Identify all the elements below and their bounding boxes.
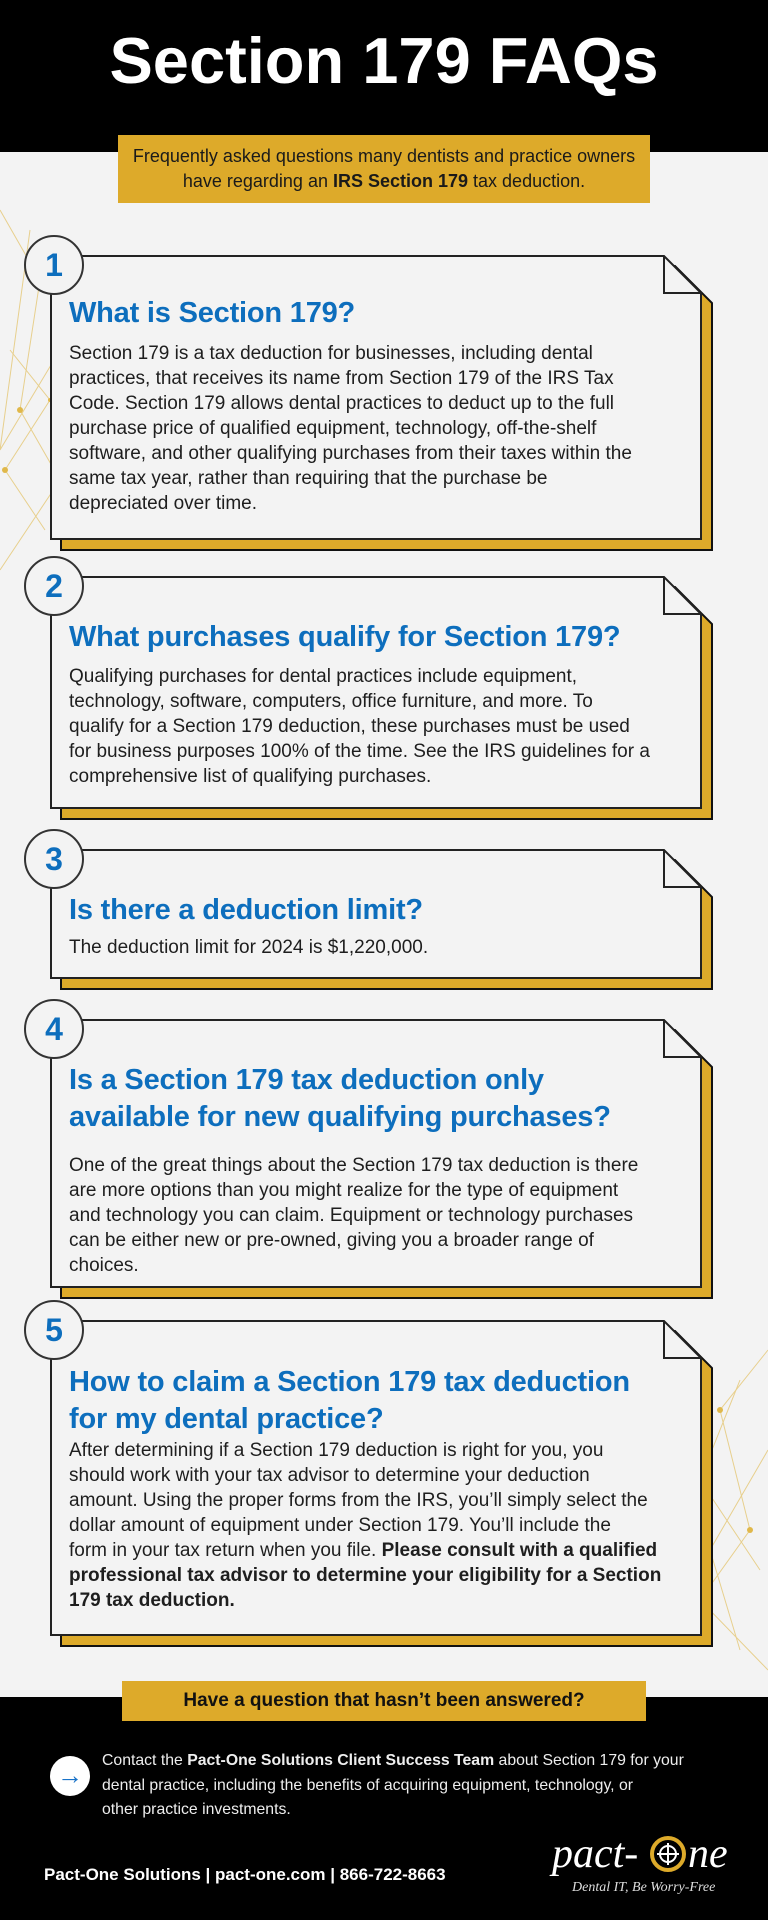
subtitle box xyxy=(118,135,650,203)
number 4 xyxy=(24,999,84,1059)
body 4: are more options than you might realize for the type of equipment xyxy=(69,1180,618,1201)
body 3: The deduction limit for 2024 is $1,220,000. xyxy=(69,937,428,958)
number 3 xyxy=(24,829,84,889)
header band xyxy=(0,0,768,152)
body 1: Code. Section 179 allows dental practices to deduct up to the full xyxy=(69,393,614,414)
title: Section 179 FAQs xyxy=(109,24,659,97)
panel: card 5 xyxy=(24,1300,713,1647)
logo xyxy=(550,1831,728,1895)
number 1 xyxy=(24,235,84,295)
body 1: purchase price of qualified equipment, technology, off-the-shelf xyxy=(69,418,596,439)
heading 1: What is Section 179? xyxy=(69,297,355,329)
contact text xyxy=(102,1752,684,1818)
body 5: amount. Using the proper forms from the IRS, you’ll simply select the xyxy=(69,1490,648,1511)
panel: card 4 xyxy=(24,999,713,1299)
body 5: professional tax advisor to determine your eligibility for a Section xyxy=(69,1565,661,1586)
panel: card 2 xyxy=(24,556,713,820)
body 1: practices, that receives its name from Section 179 of the IRS Tax xyxy=(69,368,614,389)
footer band xyxy=(0,1697,768,1920)
panel: card 1 xyxy=(24,235,713,551)
body 2: for business purposes 100% of the time. See the IRS guidelines for a xyxy=(69,741,650,762)
body 5: After determining if a Section 179 deduction is right for you, you xyxy=(69,1440,603,1461)
body 2: comprehensive list of qualifying purchases. xyxy=(69,766,431,787)
heading 4: Is a Section 179 tax deduction only xyxy=(69,1064,544,1096)
body 2 xyxy=(69,666,650,787)
footer contact line: Pact-One Solutions | pact-one.com | 866-722-8663 xyxy=(44,1865,446,1884)
logo: pact- xyxy=(552,1831,638,1877)
body 5: form in your tax return when you file. Please consult with a qualified xyxy=(69,1540,657,1561)
number 2 xyxy=(24,556,84,616)
body 4 xyxy=(69,1155,638,1276)
subtitle box: have regarding an IRS Section 179 tax deduction. xyxy=(183,171,585,191)
heading 3: Is there a deduction limit? xyxy=(69,894,423,926)
number 5 xyxy=(24,1300,84,1360)
body 1: depreciated over time. xyxy=(69,493,257,514)
heading 4: available for new qualifying purchases? xyxy=(69,1101,611,1133)
number 3: 3 xyxy=(45,841,63,877)
heading 5: How to claim a Section 179 tax deduction xyxy=(69,1366,630,1398)
body 2: Qualifying purchases for dental practices include equipment, xyxy=(69,666,577,687)
body 1: same tax year, rather than requiring that the purchase be xyxy=(69,468,547,489)
number 5: 5 xyxy=(45,1312,63,1348)
logo: Dental IT, Be Worry-Free xyxy=(572,1880,715,1895)
body 4: can be either new or pre-owned, giving you a broader range of xyxy=(69,1230,594,1251)
body 2: technology, software, computers, office furniture, and more. To xyxy=(69,691,593,712)
body 5: dollar amount of equipment under Section 179. You’ll include the xyxy=(69,1515,611,1536)
body 4: choices. xyxy=(69,1255,139,1276)
contact text: other practice investments. xyxy=(102,1801,291,1818)
number 1: 1 xyxy=(45,247,63,283)
icon: arrow circle xyxy=(50,1756,90,1796)
body 5: 179 tax deduction. xyxy=(69,1590,235,1611)
body 2: qualify for a Section 179 deduction, these purchases must be used xyxy=(69,716,630,737)
body 4: One of the great things about the Section 179 tax deduction is there xyxy=(69,1155,638,1176)
body 5 xyxy=(69,1440,661,1611)
callout bar xyxy=(122,1681,646,1721)
icon: arrow circle: → xyxy=(57,1760,83,1790)
panel: card 3 xyxy=(24,829,713,990)
number 2: 2 xyxy=(45,568,63,604)
body 4: and technology you can claim. Equipment or technology purchases xyxy=(69,1205,633,1226)
callout bar: Have a question that hasn’t been answered? xyxy=(183,1690,585,1711)
body 1 xyxy=(69,343,632,514)
heading 2: What purchases qualify for Section 179? xyxy=(69,621,620,653)
body 1: Section 179 is a tax deduction for businesses, including dental xyxy=(69,343,593,364)
number 4: 4 xyxy=(45,1011,63,1047)
heading 5 xyxy=(69,1366,630,1435)
heading 5: for my dental practice? xyxy=(69,1403,384,1435)
body 1: software, and other qualifying purchases from their taxes within the xyxy=(69,443,632,464)
contact text: dental practice, including the benefits of acquiring equipment, technology, or xyxy=(102,1776,633,1794)
subtitle box: Frequently asked questions many dentists and practice owners xyxy=(133,146,635,166)
body 5: should work with your tax advisor to determine your deduction xyxy=(69,1465,590,1486)
logo: ne xyxy=(688,1831,728,1877)
heading 4 xyxy=(69,1064,611,1133)
contact text: Contact the Pact-One Solutions Client Success Team about Section 179 for your xyxy=(102,1752,684,1769)
